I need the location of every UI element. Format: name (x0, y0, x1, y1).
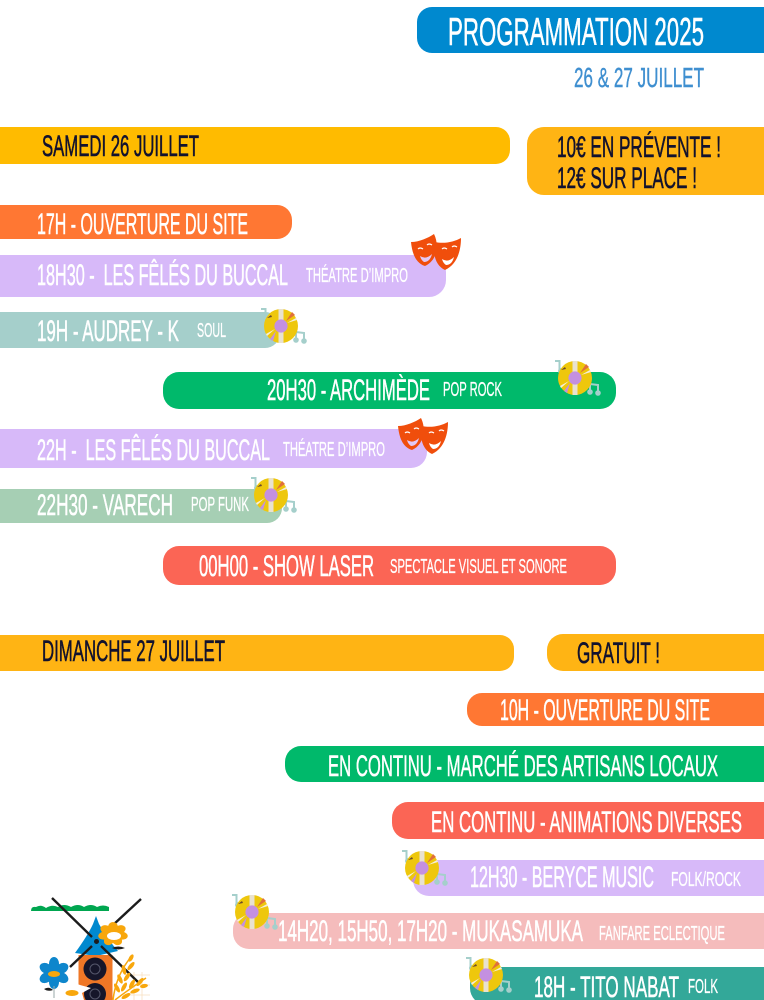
icon: theatre masks (398, 418, 448, 454)
heading: samedi 26 juillet (0, 127, 510, 164)
icon: vinyl record (555, 361, 601, 396)
heading: dimanche 27 juillet (0, 635, 514, 671)
slot: 00h00 show laser: 00H00 - SHOW LASER (199, 550, 374, 583)
slot: 17h ouverture: 17H - OUVERTURE DU SITE (37, 208, 248, 241)
slot: 22h les fêlés du buccal: 22H - LES FÊLÉS DU BUCCAL (37, 434, 270, 467)
slot: 22h les fêlés du buccal: THÉATRE D’IMPRO (283, 438, 385, 461)
slot: 20h30 archimède: POP ROCK (443, 379, 502, 401)
slot: 22h30 varech: POP FUNK (191, 494, 249, 516)
illustration: windmill with speakers and flowers (31, 898, 150, 1000)
icon: vinyl record (232, 895, 278, 930)
slot: 19h audrey-k: 19H - AUDREY - K (37, 315, 179, 348)
slot: 18h30 les fêlés du buccal (0, 255, 446, 297)
slot: 20h30 archimède: 20H30 - ARCHIMÈDE (267, 374, 430, 407)
slot: 18h tito nabat (470, 967, 764, 1000)
slot: 20h30 archimède (163, 372, 616, 409)
slot: 18h30 les fêlés du buccal: THÉATRE D’IMPRO (306, 264, 408, 287)
callout: ticket prices (527, 127, 764, 195)
callout: gratuit: GRATUIT ! (577, 637, 660, 670)
icon: vinyl record (261, 309, 307, 344)
icon: vinyl record (402, 851, 448, 886)
icon: vinyl record (251, 478, 297, 513)
slot: 00h00 show laser (163, 546, 616, 585)
slot: 17h ouverture (0, 205, 292, 241)
heading: samedi 26 juillet: SAMEDI 26 JUILLET (42, 130, 199, 163)
slot: 00h00 show laser: SPECTACLE VISUEL ET SONORE (390, 556, 567, 578)
icon: theatre masks (411, 234, 461, 270)
icon: vinyl record (466, 958, 512, 993)
callout: gratuit (547, 634, 764, 671)
slot: 22h30 varech: 22H30 - VARECH (37, 489, 173, 522)
heading: dimanche 27 juillet: DIMANCHE 27 JUILLET (42, 635, 225, 668)
slot: 18h tito nabat: FOLK (688, 976, 718, 998)
slot: 18h30 les fêlés du buccal: 18H30 - LES FÊLÉS DU BUCCAL (37, 259, 288, 292)
slot: 19h audrey-k: SOUL (197, 320, 226, 342)
